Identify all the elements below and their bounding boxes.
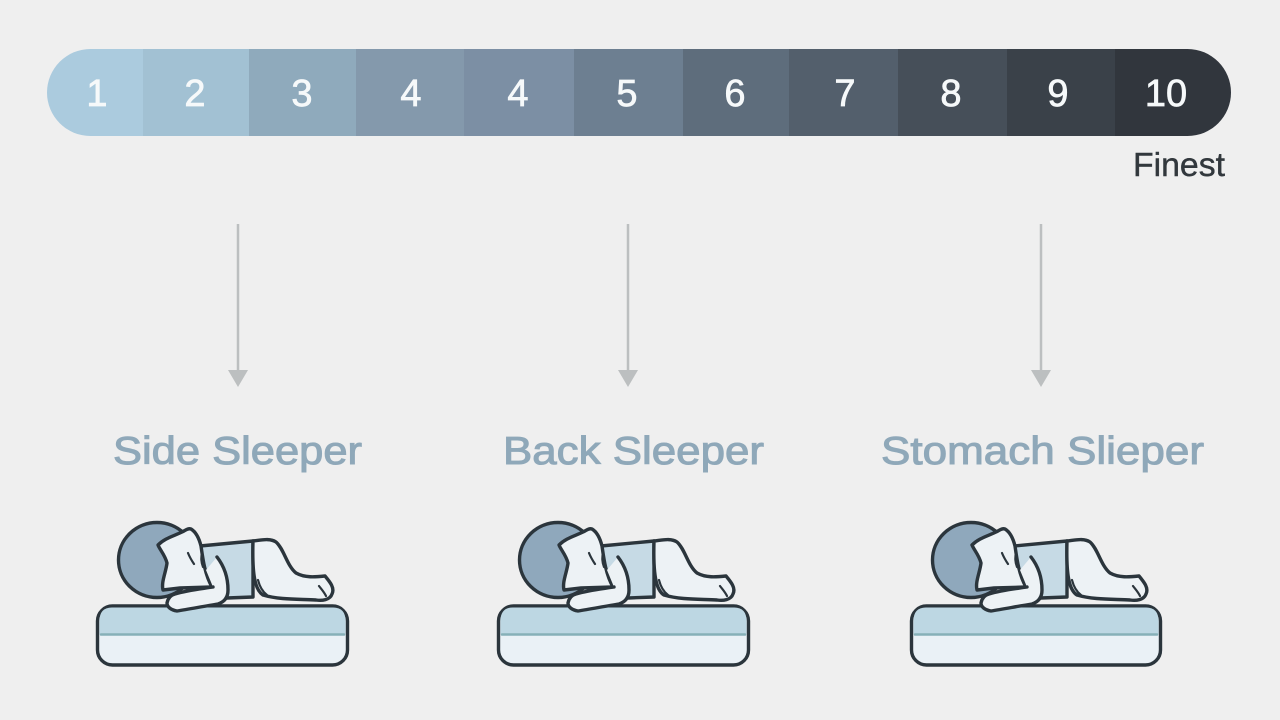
firmness scale bar: 8 [940, 73, 962, 115]
firmness scale bar: 9 [1047, 73, 1069, 115]
firmness scale bar: 6 [724, 73, 746, 115]
heading: stomach sleeper: Stomach Slieper [881, 430, 1204, 473]
firmness scale bar: 4 [400, 73, 422, 115]
arrow: stomach sleeper [1031, 224, 1051, 387]
arrow: side sleeper [228, 224, 248, 387]
firmness scale bar: 2 [184, 73, 206, 115]
icon: side sleeper on mattress [98, 522, 348, 665]
firmness scale bar: 10 [1145, 73, 1187, 115]
scale end label: Finest [1133, 146, 1225, 183]
firmness scale bar: 3 [291, 73, 313, 115]
heading: side sleeper: Side Sleeper [113, 430, 362, 473]
firmness scale bar: 4 [507, 73, 529, 115]
icon: stomach sleeper on mattress [912, 522, 1160, 665]
heading: back sleeper: Back Sleeper [503, 430, 764, 473]
firmness scale bar [47, 49, 1231, 136]
firmness scale bar: 1 [86, 73, 108, 115]
icon: back sleeper on mattress [498, 522, 748, 665]
arrow: back sleeper [618, 224, 638, 387]
firmness scale bar: 7 [834, 73, 856, 115]
firmness scale bar: 5 [616, 73, 638, 115]
